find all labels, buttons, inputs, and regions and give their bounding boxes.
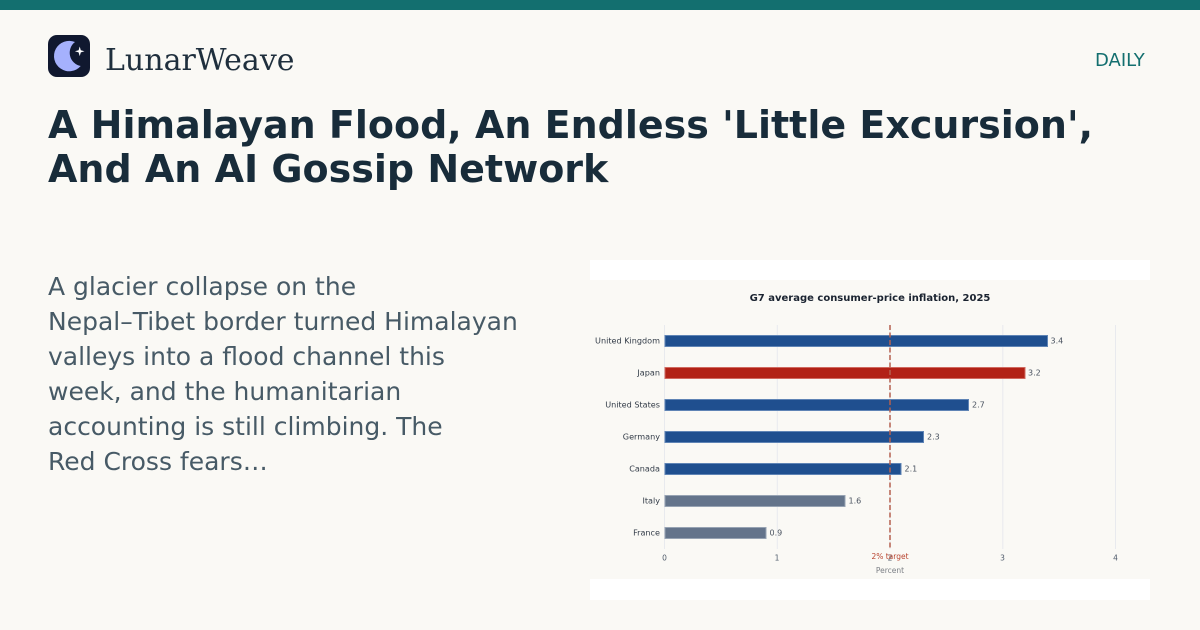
article excerpt: A glacier collapse on the — [48, 272, 356, 301]
panel: chart card — [590, 260, 1150, 600]
brand name: LunarWeave — [105, 43, 295, 78]
axis tick labels: 2 — [888, 554, 893, 562]
title — [48, 103, 1093, 191]
row: France — [633, 528, 782, 538]
title: A Himalayan Flood, An Endless 'Little Excursion', — [48, 103, 1093, 147]
2% target reference line — [889, 325, 891, 548]
icon: crescent moon logo — [48, 35, 90, 77]
row: Japan: 3.2 — [1028, 369, 1041, 378]
chart title: G7 average consumer-price inflation, 2025 — [750, 293, 990, 304]
article excerpt: Red Cross fears… — [48, 447, 268, 476]
article excerpt: valleys into a flood channel this — [48, 342, 445, 371]
row: Italy: Italy — [642, 496, 660, 506]
article excerpt: accounting is still climbing. The — [48, 412, 443, 441]
row: United Kingdom — [595, 336, 1063, 346]
row: Canada: Canada — [629, 464, 660, 474]
row: France: France — [633, 528, 660, 538]
row: Canada: 2.1 — [904, 465, 917, 474]
row: United States: United States — [605, 400, 660, 410]
axis tick labels: 4 — [1113, 554, 1118, 562]
row: United Kingdom: 3.4 — [1050, 337, 1063, 346]
article excerpt: week, and the humanitarian — [48, 377, 401, 406]
section label: DAILY — [1095, 50, 1145, 71]
row: United States: 2.7 — [972, 401, 985, 410]
article excerpt: Nepal–Tibet border turned Himalayan — [48, 307, 518, 336]
row: France: 0.9 — [770, 529, 782, 538]
axis tick labels: 0 — [662, 554, 667, 562]
row: Italy: 1.6 — [848, 497, 861, 506]
axis tick labels — [662, 554, 1118, 562]
axis title: Percent — [876, 566, 904, 575]
row: Germany — [623, 432, 940, 442]
axis tick labels: 1 — [775, 554, 780, 562]
title: And An AI Gossip Network — [48, 147, 608, 191]
row: United Kingdom: United Kingdom — [595, 336, 660, 346]
row: United States — [605, 400, 985, 410]
row: Japan — [636, 368, 1041, 378]
row: Germany: Germany — [623, 432, 660, 442]
bar chart: G7 inflation — [590, 280, 1150, 579]
row: Italy — [642, 496, 861, 506]
article excerpt — [48, 272, 518, 476]
top accent bar — [0, 0, 1200, 10]
axis tick labels: 3 — [1000, 554, 1005, 562]
row: Canada — [629, 464, 917, 474]
row: Japan: Japan — [636, 368, 660, 378]
2% target label: 2% target — [871, 552, 909, 561]
row: Germany: 2.3 — [927, 433, 940, 442]
